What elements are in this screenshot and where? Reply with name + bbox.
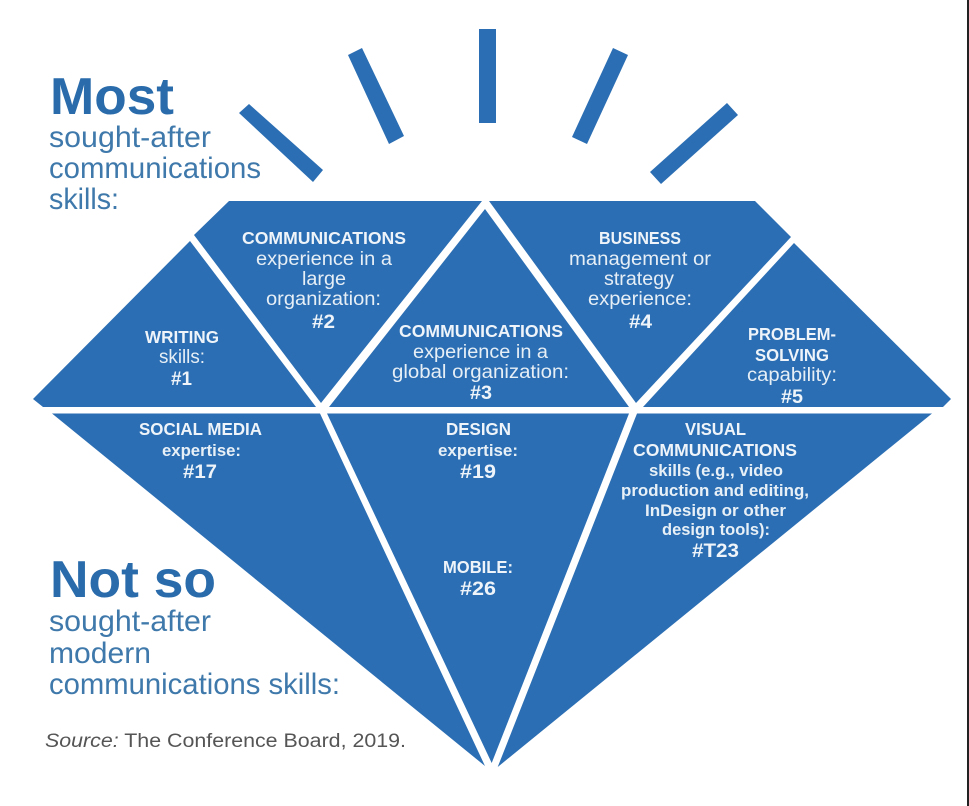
panel: design expertise #19 and mobile #26: #19 xyxy=(460,462,496,483)
panel: business management or strategy experience #4: strategy xyxy=(604,269,675,290)
panel: communications experience in a large organization #2: COMMUNICATIONS xyxy=(242,228,406,248)
panel: problem-solving capability #5: PROBLEM- xyxy=(748,324,836,344)
panel: communications experience in a large organization #2 xyxy=(194,201,482,403)
panel: design expertise #19 and mobile #26: MOBILE: xyxy=(443,557,513,577)
panel: writing skills #1: WRITING xyxy=(145,327,219,347)
panel: problem-solving capability #5: SOLVING xyxy=(755,345,829,365)
panel: design expertise #19 and mobile #26 xyxy=(327,414,629,763)
heading: most sought-after communications skills xyxy=(49,68,261,216)
heading: most sought-after communications skills: communications xyxy=(49,152,261,185)
panel: communications experience in a global organization #3: experience in a xyxy=(413,342,548,363)
heading: not so sought-after modern communications skills xyxy=(49,551,340,701)
heading: most sought-after communications skills: Most xyxy=(50,68,174,126)
panel: problem-solving capability #5 xyxy=(643,243,951,408)
panel: social media expertise #17 xyxy=(52,414,485,766)
panel: writing skills #1 xyxy=(33,241,316,407)
heading: not so sought-after modern communications skills: sought-after xyxy=(49,605,211,638)
panel: business management or strategy experience #4: management or xyxy=(569,249,712,270)
panel: social media expertise #17: SOCIAL MEDIA xyxy=(139,419,262,439)
panel: problem-solving capability #5: #5 xyxy=(781,387,803,408)
panel: visual communications skills #T23: skills (e.g., video xyxy=(649,462,783,480)
panel: visual communications skills #T23: #T23 xyxy=(692,541,739,562)
panel: design expertise #19 and mobile #26: DESIGN xyxy=(446,419,511,439)
panel: communications experience in a global organization #3 xyxy=(329,209,629,407)
panel: business management or strategy experience #4: experience: xyxy=(588,289,692,310)
heading: most sought-after communications skills: skills: xyxy=(49,183,119,216)
panel: communications experience in a large organization #2: experience in a xyxy=(256,249,392,270)
panel: problem-solving capability #5: capability: xyxy=(747,365,837,386)
panel: communications experience in a global organization #3: #3 xyxy=(470,383,492,404)
panel: writing skills #1: #1 xyxy=(171,369,192,390)
panel: communications experience in a global organization #3: global organization: xyxy=(392,362,569,383)
source note: Source: The Conference Board, 2019. xyxy=(45,731,406,752)
panel: design expertise #19 and mobile #26: expertise: xyxy=(438,442,518,460)
panel: business management or strategy experience #4: #4 xyxy=(629,312,652,333)
panel: communications experience in a large organization #2: organization: xyxy=(266,289,381,310)
panel: visual communications skills #T23: InDesign or other xyxy=(645,502,787,520)
heading: not so sought-after modern communications skills: communications skills: xyxy=(49,668,340,701)
panel: communications experience in a large organization #2: large xyxy=(302,269,346,290)
panel: visual communications skills #T23: production and editing, xyxy=(621,482,809,500)
panel: social media expertise #17: expertise: xyxy=(162,442,241,460)
panel: visual communications skills #T23 xyxy=(498,414,932,767)
panel: business management or strategy experience #4 xyxy=(489,201,791,403)
panel: visual communications skills #T23: design tools): xyxy=(662,521,770,539)
panel: visual communications skills #T23: COMMUNICATIONS xyxy=(633,440,797,460)
heading: not so sought-after modern communications skills: modern xyxy=(49,637,151,670)
panel: social media expertise #17: #17 xyxy=(183,462,217,483)
panel: design expertise #19 and mobile #26: #26 xyxy=(460,579,496,600)
panel: writing skills #1: skills: xyxy=(159,347,205,368)
panel: communications experience in a global organization #3: COMMUNICATIONS xyxy=(399,321,563,341)
heading: not so sought-after modern communications skills: Not so xyxy=(50,551,216,609)
panel: visual communications skills #T23: VISUAL xyxy=(685,419,746,439)
icon: sparkle rays above diamond xyxy=(239,29,738,184)
heading: most sought-after communications skills: sought-after xyxy=(49,121,211,154)
panel: communications experience in a large organization #2: #2 xyxy=(312,312,335,333)
panel: business management or strategy experience #4: BUSINESS xyxy=(599,228,681,248)
